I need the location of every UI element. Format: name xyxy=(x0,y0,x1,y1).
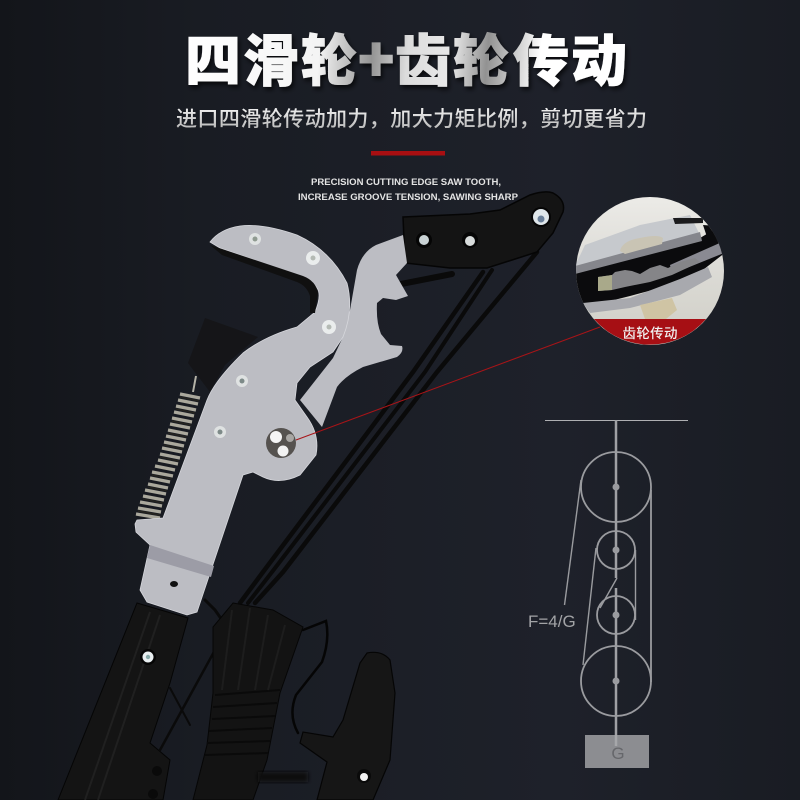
force label: F=4/G xyxy=(528,612,576,631)
lower plate xyxy=(583,267,712,313)
saw tooth edge xyxy=(210,245,318,313)
pulley diagram xyxy=(545,420,688,746)
subtitle: 进口四滑轮传动加力，加大力矩比例，剪切更省力 xyxy=(176,108,647,131)
black gap xyxy=(576,231,722,303)
pivot bolt xyxy=(266,428,296,458)
second plate edge xyxy=(670,244,722,269)
pruner pole, rope and handle xyxy=(58,252,537,800)
lower bolt xyxy=(640,298,677,319)
weight box xyxy=(585,735,649,768)
gear teeth xyxy=(598,258,700,291)
upper plate edge xyxy=(575,232,702,274)
spring xyxy=(136,376,200,518)
pruner head xyxy=(135,192,564,615)
grip bolt xyxy=(357,769,371,783)
english caption: INCREASE GROOVE TENSION, SAWING SHARP xyxy=(298,192,519,203)
handle grip xyxy=(300,652,395,800)
english caption: PRECISION CUTTING EDGE SAW TOOTH, xyxy=(311,177,501,188)
red leader line xyxy=(296,327,600,440)
rope coil xyxy=(193,603,303,800)
dark top right parts xyxy=(673,218,703,224)
main blade xyxy=(135,225,350,615)
red accent bar xyxy=(371,151,445,156)
title: + xyxy=(358,25,394,94)
black bracket xyxy=(403,192,564,268)
cord bundles xyxy=(160,252,537,750)
english caption xyxy=(298,177,519,203)
upper plate surface xyxy=(575,215,700,266)
spring mount block xyxy=(188,318,258,392)
pole bolt xyxy=(140,649,156,665)
plate fold band xyxy=(147,545,214,577)
title: 齿轮传动 xyxy=(395,30,627,93)
top screw head xyxy=(620,236,663,254)
weight box: G xyxy=(611,744,625,763)
banner label: 齿轮传动 xyxy=(622,326,678,341)
pole xyxy=(58,603,188,800)
blade rivets xyxy=(214,233,336,438)
title: 四滑轮 xyxy=(185,30,357,93)
secondary blade xyxy=(300,235,408,427)
plate hole xyxy=(170,581,178,587)
floor shadow xyxy=(258,772,308,782)
red banner xyxy=(594,319,706,345)
gear detail lens xyxy=(575,197,726,345)
